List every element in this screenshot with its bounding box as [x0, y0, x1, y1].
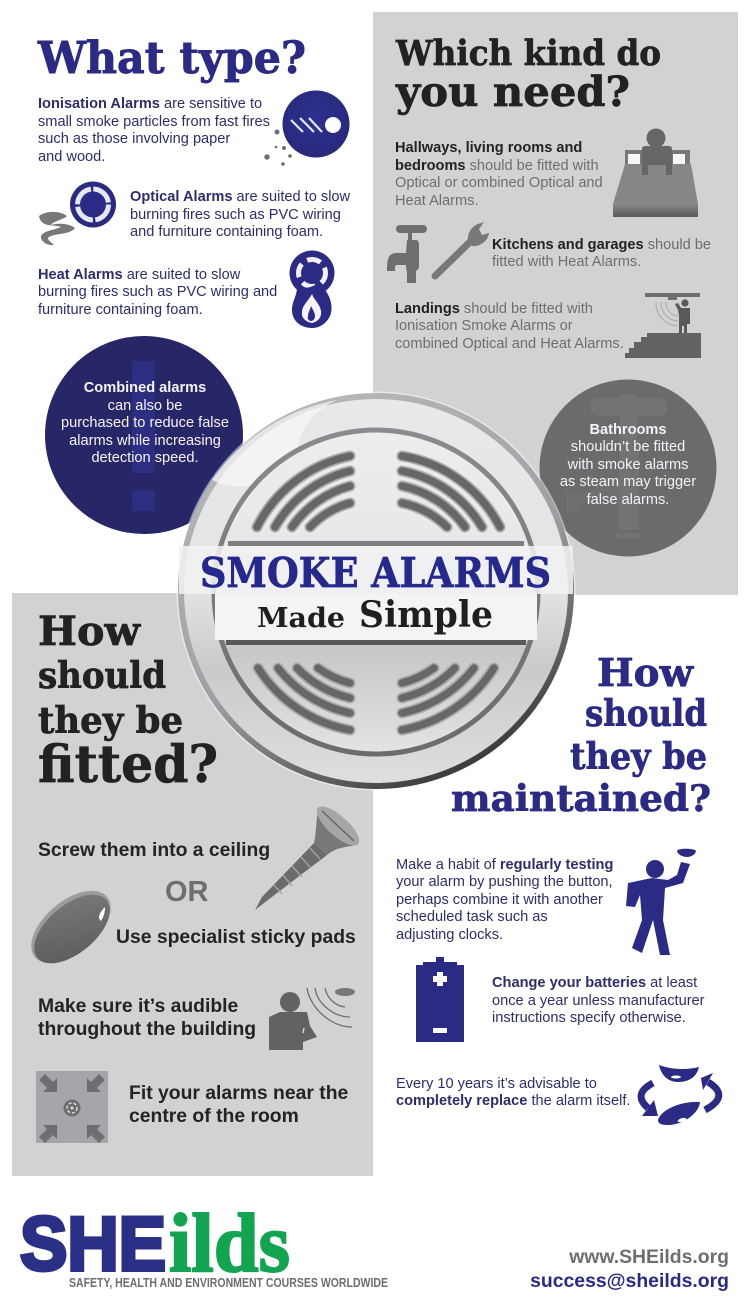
text: make sure it is audible: Make sure it’s audible [38, 995, 239, 1017]
text block: heat alarms: furniture containing foam. [38, 302, 203, 318]
text block: change batteries: Change your batteries at least [492, 975, 697, 991]
heading: which kind do you need: you need? [395, 68, 630, 116]
text block: kitchens and garages [492, 237, 711, 270]
smoke alarm illustration with title [176, 392, 576, 790]
callout: bathrooms [540, 380, 716, 556]
text block: heat alarms: Heat Alarms are suited to slow [38, 267, 241, 283]
text block: landings: combined Optical and Heat Alarms. [395, 336, 624, 352]
text: fit your alarms: Fit your alarms near the [129, 1082, 349, 1104]
icon: person hearing alarm [269, 988, 355, 1050]
text block: hallways: Hallways, living rooms and [395, 140, 582, 156]
text: make sure it is audible [38, 995, 256, 1040]
panel: which kind do you need [373, 12, 738, 595]
icon: replacement cycle [641, 1065, 719, 1125]
text block: change batteries [492, 975, 705, 1026]
text block: ionisation alarms [38, 96, 270, 165]
text block: ionisation alarms: Ionisation Alarms are sensitive to [38, 96, 262, 112]
text block: ionisation alarms: and wood. [38, 149, 105, 165]
heading: how should they be maintained: How [597, 650, 694, 695]
icon: optical alarm with smoke [39, 182, 116, 245]
text: fit your alarms: centre of the room [129, 1105, 299, 1127]
heading: how should they be maintained [451, 650, 711, 820]
callout: combined alarms: Combined alarms [84, 380, 206, 396]
heading: how should they be maintained: should [585, 693, 707, 735]
text block: landings: Landings should be fitted with [395, 301, 593, 317]
text block: regularly testing: your alarm by pushing the button, [396, 874, 613, 890]
text block: heat alarms [38, 267, 277, 318]
text block: kitchens and garages: fitted with Heat Alarms. [492, 254, 641, 270]
text block: landings [395, 301, 624, 352]
icon: ionisation alarm [264, 90, 350, 166]
heading: how should they be maintained: maintained? [451, 778, 711, 820]
text block: replace alarm [396, 1076, 630, 1109]
icon: screw [255, 801, 365, 910]
text block: replace alarm: completely replace the alarm itself. [396, 1093, 630, 1109]
callout: bathrooms: as steam may trigger [560, 474, 696, 490]
callout: bathrooms: Bathrooms [589, 422, 667, 438]
heading: which kind do you need [395, 33, 661, 116]
subtitle: made simple: Simple [359, 594, 493, 636]
logo: SHEilds: SHE [20, 1202, 166, 1287]
heading: what type: What type? [37, 33, 306, 84]
text block: regularly testing: Make a habit of regularly testing [396, 857, 613, 873]
text: make sure it is audible: throughout the building [38, 1018, 256, 1040]
heading: which kind do you need: Which kind do [395, 33, 661, 74]
text block: regularly testing: scheduled task such as [396, 909, 548, 925]
icon: heat alarm with flame [290, 250, 334, 328]
callout: combined alarms [45, 336, 243, 534]
icon: person on bed [613, 128, 698, 217]
text block: hallways: bedrooms should be fitted with [395, 158, 599, 174]
text block: optical alarms: and furniture containing foam. [130, 224, 323, 240]
subtitle: made simple: Made [257, 603, 345, 634]
text block: optical alarms: burning fires such as PVC wiring [130, 207, 341, 223]
text block: hallways: Heat Alarms. [395, 193, 479, 209]
text block: change batteries: once a year unless manufacturer [492, 993, 705, 1009]
logo: SHEilds [20, 1197, 388, 1290]
callout: bathrooms: false alarms. [587, 492, 669, 508]
contact details: success@sheilds.org [530, 1270, 729, 1292]
callout: bathrooms: with smoke alarms [567, 457, 688, 473]
text block: optical alarms [130, 189, 351, 240]
title: smoke alarms: SMOKE ALARMS [200, 549, 551, 597]
text block: hallways [395, 140, 603, 209]
icon: sticky pad [18, 877, 124, 977]
heading: how should they be maintained: they be [570, 736, 707, 778]
heading: how should they be fitted: should [38, 655, 166, 697]
contact details [530, 1246, 729, 1292]
text block: ionisation alarms: small smoke particles from fast fires [38, 114, 270, 130]
text block: landings: Ionisation Smoke Alarms or [395, 318, 573, 334]
vents: four arc groups [257, 456, 500, 730]
callout: combined alarms: alarms while increasing [69, 433, 221, 449]
text block: heat alarms: burning fires such as PVC wiring and [38, 284, 277, 300]
heading: how should they be fitted: How [38, 608, 142, 655]
text block: change batteries: instructions specify otherwise. [492, 1010, 686, 1026]
callout: combined alarms: can also be [108, 398, 182, 414]
callout: combined alarms: purchased to reduce false [61, 415, 229, 431]
logo: SHEilds: ilds [169, 1197, 290, 1290]
text block: regularly testing [396, 857, 613, 943]
contact details: www.SHEilds.org [568, 1246, 729, 1268]
text: use specialist sticky pads: Use specialist sticky pads [116, 926, 356, 948]
icon: battery [416, 957, 464, 1042]
text block: replace alarm: Every 10 years it’s advisable to [396, 1076, 597, 1092]
callout: combined alarms: detection speed. [91, 450, 199, 466]
heading: how should they be fitted: they be [38, 700, 183, 742]
icon: person on stairs testing alarm [625, 293, 701, 358]
text block: ionisation alarms: such as those involving paper [38, 131, 230, 147]
text: fit your alarms [129, 1082, 349, 1127]
heading: how should they be fitted [38, 608, 218, 795]
icon: room plan with centred alarm [36, 1071, 108, 1143]
text block: regularly testing: perhaps combine it with another [396, 892, 603, 908]
logo tagline: SAFETY, HEALTH AND ENVIRONMENT COURSES WORLDWIDE [69, 1276, 388, 1290]
icon: person pushing alarm button [626, 849, 696, 955]
text: or: OR [165, 876, 209, 908]
panel: how should they be fitted [12, 593, 373, 1176]
text: screw them into a ceiling: Screw them into a ceiling [38, 839, 270, 861]
callout: bathrooms: shouldn’t be fitted [571, 439, 685, 455]
text block: hallways: Optical or combined Optical and [395, 175, 603, 191]
text block: regularly testing: adjusting clocks. [396, 927, 503, 943]
text block: optical alarms: Optical Alarms are suited to slow [130, 189, 351, 205]
subtitle: made simple [257, 594, 493, 636]
icon: tap and spanner [387, 222, 489, 283]
heading: how should they be fitted: fitted? [38, 735, 218, 795]
text block: kitchens and garages: Kitchens and garages should be [492, 237, 711, 253]
